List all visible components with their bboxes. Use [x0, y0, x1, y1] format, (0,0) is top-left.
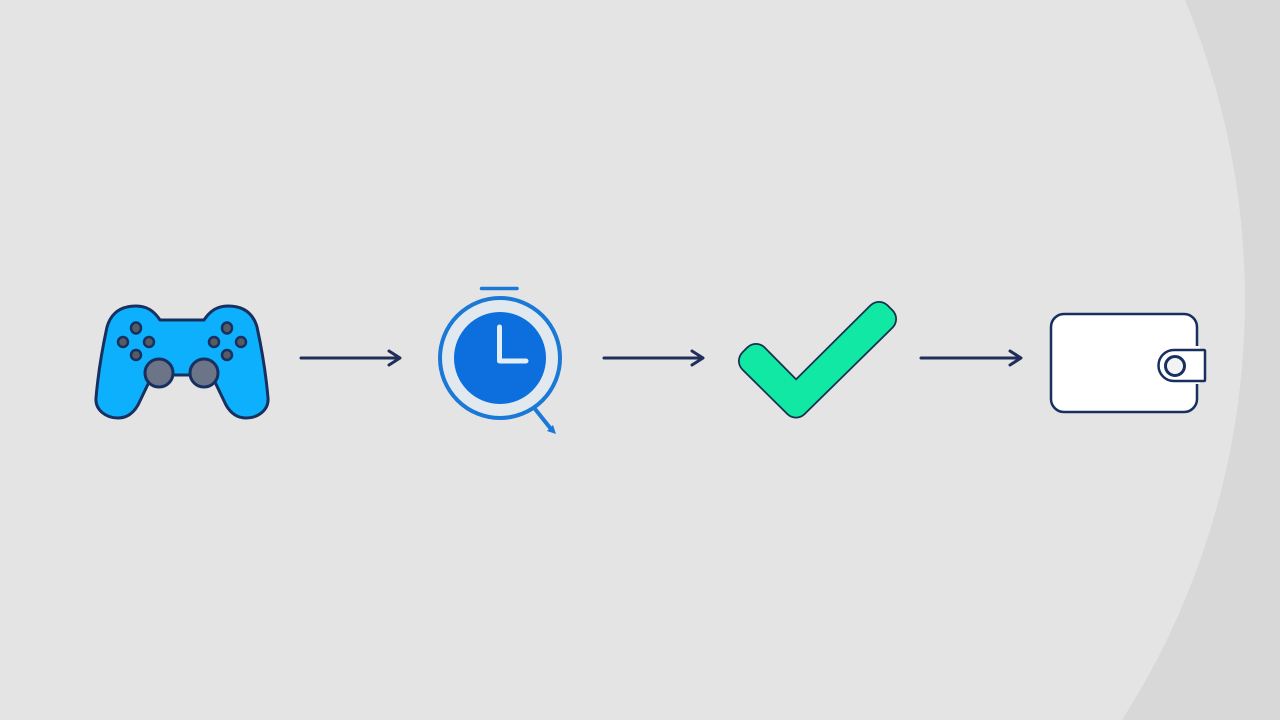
icon: stopwatch clock — [440, 288, 560, 434]
icon: wallet — [1051, 314, 1205, 412]
arrow: check mark to wallet — [921, 351, 1021, 365]
arrow: controller to clock — [301, 351, 400, 365]
icon: game controller — [96, 306, 268, 418]
arrow: clock to check mark — [604, 351, 703, 365]
icon: check mark — [751, 314, 884, 406]
